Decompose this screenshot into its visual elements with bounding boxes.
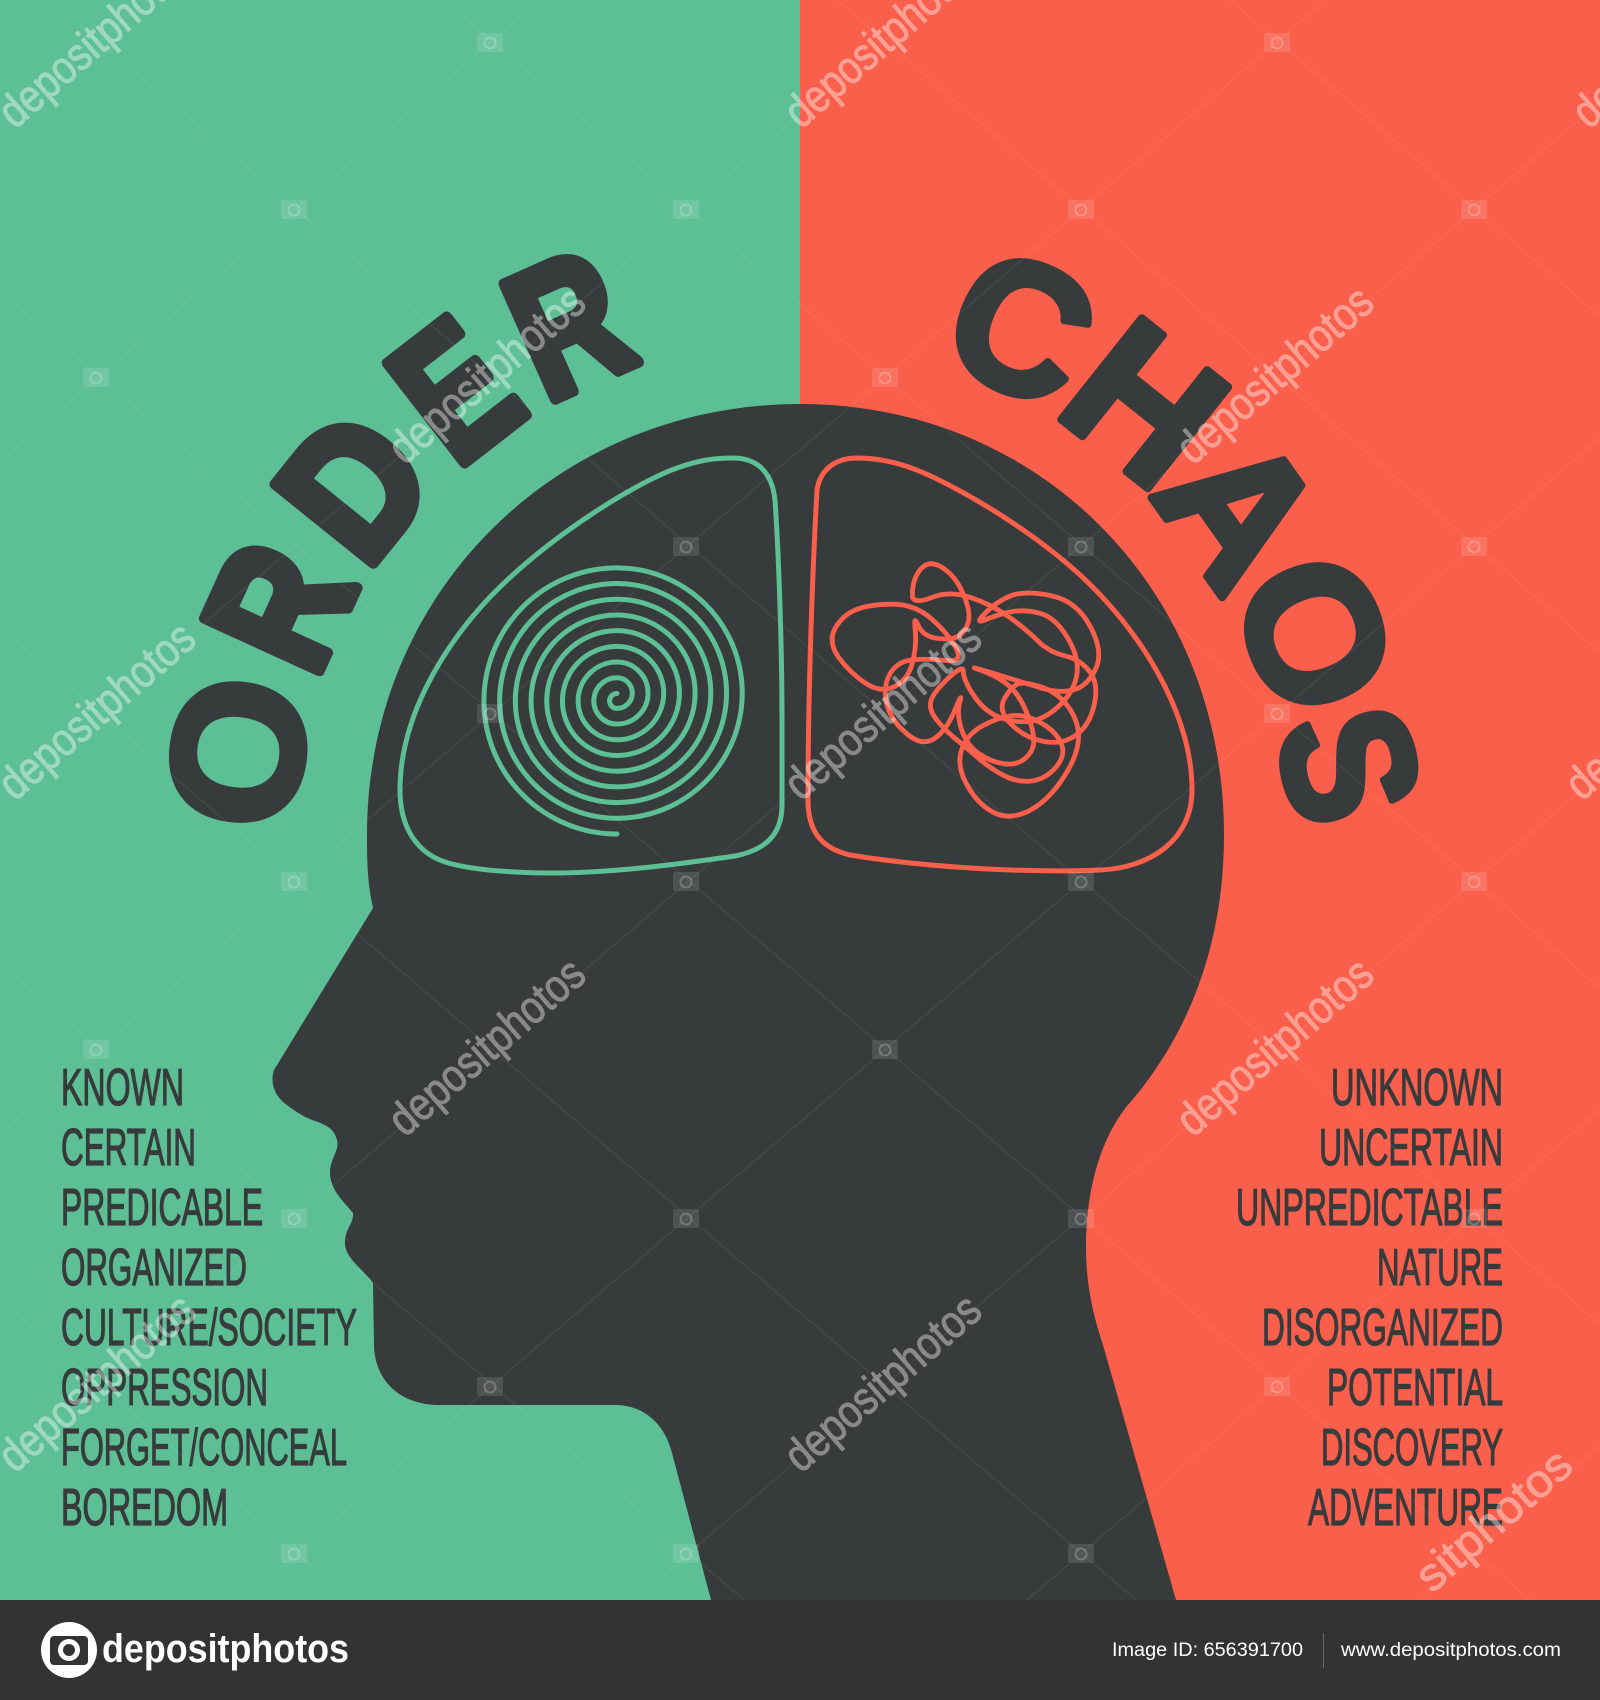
heading: ORDER <box>125 210 657 840</box>
watermark overlay: depositphotos <box>773 1283 991 1482</box>
icon: ordered spiral <box>484 568 742 834</box>
brain: order lobe <box>400 458 782 873</box>
heading: ORDER: O <box>125 663 351 840</box>
text block: order word list <box>61 1059 357 1537</box>
text block: chaos word list: NATURE <box>1377 1239 1503 1297</box>
brain: chaos lobe <box>808 458 1192 871</box>
footer bar <box>0 1600 1600 1700</box>
heading: CHAOS: A <box>1116 396 1363 625</box>
watermark overlay: depositphotos <box>377 947 595 1146</box>
heading: CHAOS: H <box>1027 279 1263 527</box>
heading: ORDER: R <box>479 210 657 438</box>
heading: CHAOS <box>918 207 1463 843</box>
heading: CHAOS: O <box>1191 526 1439 742</box>
heading: CHAOS: C <box>918 207 1124 449</box>
icon: chaotic tangle <box>832 564 1099 816</box>
text block: order word list: KNOWN <box>61 1059 184 1117</box>
text block: order word list: BOREDOM <box>61 1479 228 1537</box>
watermark overlay: depositphotos <box>773 611 991 810</box>
watermark overlay: depositphotos <box>1165 275 1383 474</box>
text block: order word list: ORGANIZED <box>61 1239 247 1297</box>
order lobe outline <box>400 458 782 873</box>
text block: order word list: CERTAIN <box>61 1119 196 1177</box>
watermark overlay: depositphotos <box>377 275 595 474</box>
panel: chaos background <box>800 0 1600 1600</box>
heading: ORDER: R <box>165 516 393 696</box>
footer image id: Image ID: 656391700 <box>1112 1640 1303 1661</box>
panel: order background <box>0 0 800 1600</box>
watermark overlay: sitphotos <box>1404 1438 1582 1602</box>
chaos lobe outline <box>808 458 1192 871</box>
heading: ORDER: E <box>355 280 555 500</box>
head silhouette <box>273 404 1224 1600</box>
footer logo text: depositphotos <box>102 1627 349 1671</box>
heading: CHAOS: S <box>1236 687 1463 843</box>
text block: order word list: FORGET/CONCEAL <box>61 1419 347 1477</box>
text block: order word list: CULTURE/SOCIETY <box>61 1299 357 1357</box>
footer website: www.depositphotos.com <box>1340 1640 1561 1661</box>
text block: order word list: OPPRESSION <box>61 1359 268 1417</box>
icon: camera logo <box>41 1622 97 1678</box>
text block: order word list: PREDICABLE <box>61 1179 263 1237</box>
text block: chaos word list: UNKNOWN <box>1331 1059 1503 1117</box>
heading: ORDER: D <box>237 376 470 596</box>
watermark overlay: depositphotos <box>1165 947 1383 1146</box>
text block: chaos word list <box>1236 1059 1503 1537</box>
